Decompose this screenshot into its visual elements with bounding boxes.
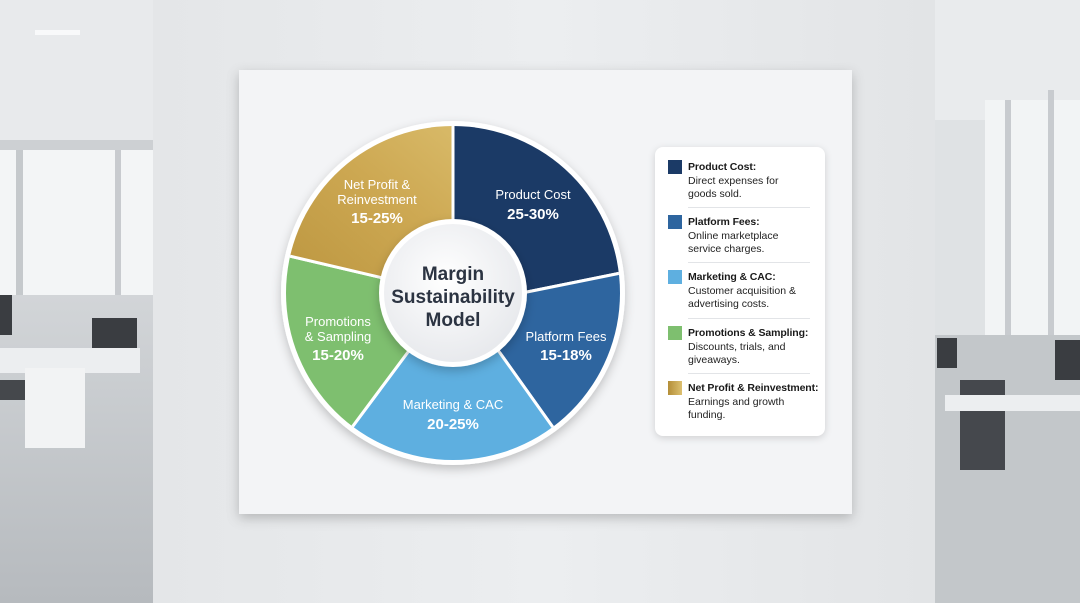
label: platform fees: Platform Fees [526, 329, 607, 344]
center title: Sustainability [391, 287, 515, 308]
label: promotions: Promotions [305, 314, 371, 329]
legend item: marketing: advertising costs. [688, 298, 769, 310]
legend item: net profit [668, 381, 818, 421]
legend item: marketing [668, 270, 796, 310]
label: net profit [337, 177, 417, 227]
center circle [379, 219, 527, 367]
legend item: net profit: Net Profit & Reinvestment: [688, 382, 818, 394]
legend item: platform fees: Platform Fees: [688, 216, 760, 228]
legend item: product cost: Direct expenses for [688, 175, 778, 187]
board [239, 70, 852, 514]
segment: platform fees [500, 272, 620, 427]
label: net profit: 15-25% [351, 210, 403, 227]
legend item: net profit: Earnings and growth [688, 396, 784, 408]
label: promotions [305, 314, 371, 364]
label: platform fees: 15-18% [540, 347, 592, 364]
label: product cost: Product Cost [495, 187, 571, 202]
legend item: promotions [668, 326, 808, 366]
pie chart [276, 120, 630, 474]
left office [0, 0, 153, 603]
label: product cost [495, 187, 571, 223]
label: marketing: Marketing & CAC [403, 397, 503, 412]
label: net profit: Net Profit & [344, 177, 411, 192]
center title [391, 264, 515, 331]
center title: Margin [422, 264, 484, 285]
legend panel [655, 147, 825, 436]
right office [935, 0, 1080, 603]
legend item: net profit: funding. [688, 409, 725, 421]
legend item: product cost: Product Cost: [688, 161, 756, 173]
label: marketing [403, 397, 503, 433]
label: platform fees [526, 329, 607, 364]
legend item: platform fees [668, 215, 778, 255]
legend item: marketing: Marketing & CAC: [688, 271, 776, 283]
label: marketing: 20-25% [427, 416, 479, 433]
center title: Model [426, 310, 480, 331]
legend item: marketing: Customer acquisition & [688, 285, 796, 297]
legend item: product cost: goods sold. [688, 188, 742, 200]
segment: product cost [454, 126, 619, 290]
legend item: promotions: Discounts, trials, and [688, 341, 785, 353]
legend item: product cost [668, 160, 778, 200]
legend item: promotions: Promotions & Sampling: [688, 327, 808, 339]
center wall [153, 0, 935, 603]
legend item: platform fees: service charges. [688, 243, 764, 255]
segment: net profit [290, 126, 454, 279]
segment: marketing [352, 350, 554, 460]
label: promotions: & Sampling [305, 329, 371, 344]
legend item: platform fees: Online marketplace [688, 230, 778, 242]
label: product cost: 25-30% [507, 206, 559, 223]
label: promotions: 15-20% [312, 347, 364, 364]
segment: promotions [286, 256, 410, 428]
legend item: promotions: giveaways. [688, 354, 740, 366]
label: net profit: Reinvestment [337, 192, 417, 207]
